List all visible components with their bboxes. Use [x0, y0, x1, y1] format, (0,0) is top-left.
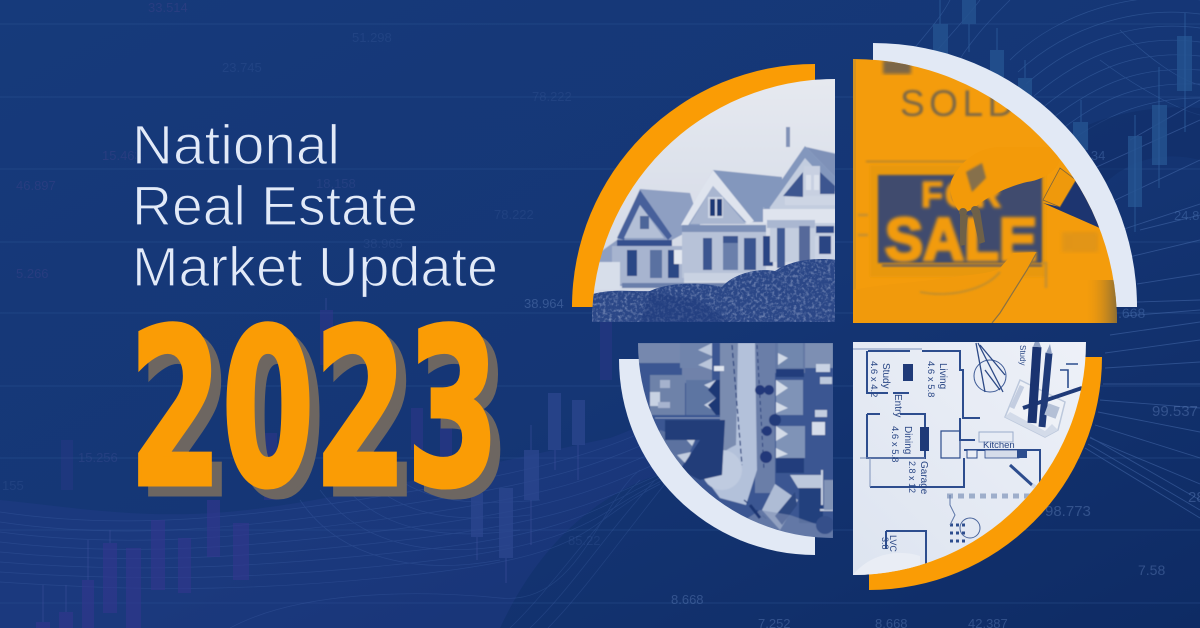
- house 2: [696, 170, 782, 224]
- year shadow: 0: [232, 294, 324, 546]
- year digits: 0: [222, 284, 314, 536]
- photo: for sale sign and keys: SALE: [885, 206, 1037, 273]
- faint chart numbers: 24.8: [1174, 208, 1199, 223]
- photo: for sale sign and keys: [852, 58, 1120, 324]
- house 3: [763, 147, 836, 262]
- faint chart numbers: 15.463: [102, 148, 142, 163]
- room labels: Kitchen: [983, 440, 1015, 451]
- faint chart numbers: 98.773: [1045, 503, 1091, 520]
- road: [712, 343, 758, 506]
- keys: [960, 210, 985, 246]
- dark trees: [755, 385, 765, 395]
- heading: National Real Estate Market Update: Real Estate: [132, 174, 418, 237]
- photo: Victorian houses: [590, 78, 838, 326]
- house 1: [596, 189, 700, 286]
- photo: floor plan blueprint: [852, 336, 1088, 577]
- year shadow: 3: [417, 294, 509, 546]
- year 2023 with drop shadow: [129, 284, 509, 546]
- top right mesh: [905, 0, 1200, 144]
- faint chart numbers: 18.158: [316, 176, 356, 191]
- photo: for sale sign and keys: FOR: [921, 174, 1003, 215]
- faint chart numbers: 99.537: [1152, 403, 1198, 420]
- lawn and driveway areas: [720, 343, 738, 473]
- faint chart numbers: 78.222: [532, 89, 572, 104]
- faint chart numbers: 38.965: [363, 236, 403, 251]
- year shadow: 2: [324, 294, 417, 546]
- lower mesh curves: [0, 400, 720, 628]
- roofs left row: [686, 380, 716, 415]
- faint chart numbers: 155: [2, 478, 24, 493]
- arc: white bottom left: [619, 359, 815, 555]
- room labels: Study: [880, 363, 891, 389]
- top right candlesticks: [933, 0, 1192, 207]
- bottom house: [762, 484, 798, 530]
- candlesticks lower left: [36, 310, 612, 628]
- faint chart numbers: 51.298: [352, 30, 392, 45]
- faint chart numbers: 0.34: [1080, 148, 1105, 163]
- year digits: 2: [129, 284, 222, 536]
- room labels: 4.6 x 5.8: [925, 361, 936, 397]
- room labels: 4.6 x 4.2: [868, 361, 879, 397]
- bushes: [590, 259, 838, 326]
- bottom hand: [853, 252, 1037, 323]
- year shadow: [139, 294, 509, 546]
- dark arc band right: [1088, 107, 1200, 200]
- heading: National Real Estate Market Update: Market Update: [132, 235, 498, 298]
- arc: white top right: [873, 43, 1137, 307]
- arc: orange top left: [572, 64, 815, 307]
- paper curl: [853, 553, 920, 575]
- room labels: Entry: [892, 394, 903, 417]
- faint chart numbers: 78.222: [494, 207, 534, 222]
- dark sleeve: [1043, 180, 1102, 229]
- faint chart numbers: 85.22: [568, 533, 601, 548]
- lower left wave band: [0, 380, 720, 628]
- faint chart numbers: 7.58: [1138, 562, 1165, 578]
- faint chart numbers: 33.514: [148, 0, 188, 15]
- room labels: [868, 345, 1027, 552]
- sign panel: [870, 165, 1046, 277]
- room labels: 4.6 x 5.8: [889, 426, 900, 462]
- quadrant circle graphic: [572, 43, 1137, 590]
- faint chart numbers: 38.964: [524, 296, 564, 311]
- photo: for sale sign and keys: SOLD: [900, 83, 1019, 124]
- faint chart numbers: .668: [1118, 305, 1145, 321]
- room labels: Garage: [918, 461, 929, 495]
- photo: aerial neighbourhood: [637, 342, 834, 540]
- top hand with keys: [950, 147, 1060, 212]
- room labels: LVC: [888, 535, 898, 552]
- year shadow: 2: [139, 294, 232, 546]
- faint chart numbers: 23.745: [222, 60, 262, 75]
- room labels: Living: [937, 363, 948, 389]
- room labels: Study: [1018, 345, 1027, 365]
- room labels: Dining: [902, 426, 913, 454]
- pencil holder: [1005, 336, 1082, 437]
- faint chart numbers: 15.256: [78, 450, 118, 465]
- roofs right row: [776, 380, 803, 415]
- right fan lines: [1085, 100, 1200, 518]
- year digits: 3: [407, 284, 499, 536]
- year digits: 2: [314, 284, 407, 536]
- arc: orange bottom right: [869, 357, 1102, 590]
- plan walls: [867, 351, 1040, 565]
- heading: National Real Estate Market Update: [132, 113, 498, 298]
- room labels: 2.8 x 12: [907, 461, 917, 493]
- faint chart numbers: 46.897: [16, 178, 56, 193]
- year digits: [129, 284, 499, 536]
- faint chart numbers: 8.668: [671, 592, 704, 607]
- heading: National Real Estate Market Update: National: [132, 113, 340, 176]
- room labels: 3.8: [880, 537, 890, 550]
- faint chart numbers: 5.266: [16, 266, 49, 281]
